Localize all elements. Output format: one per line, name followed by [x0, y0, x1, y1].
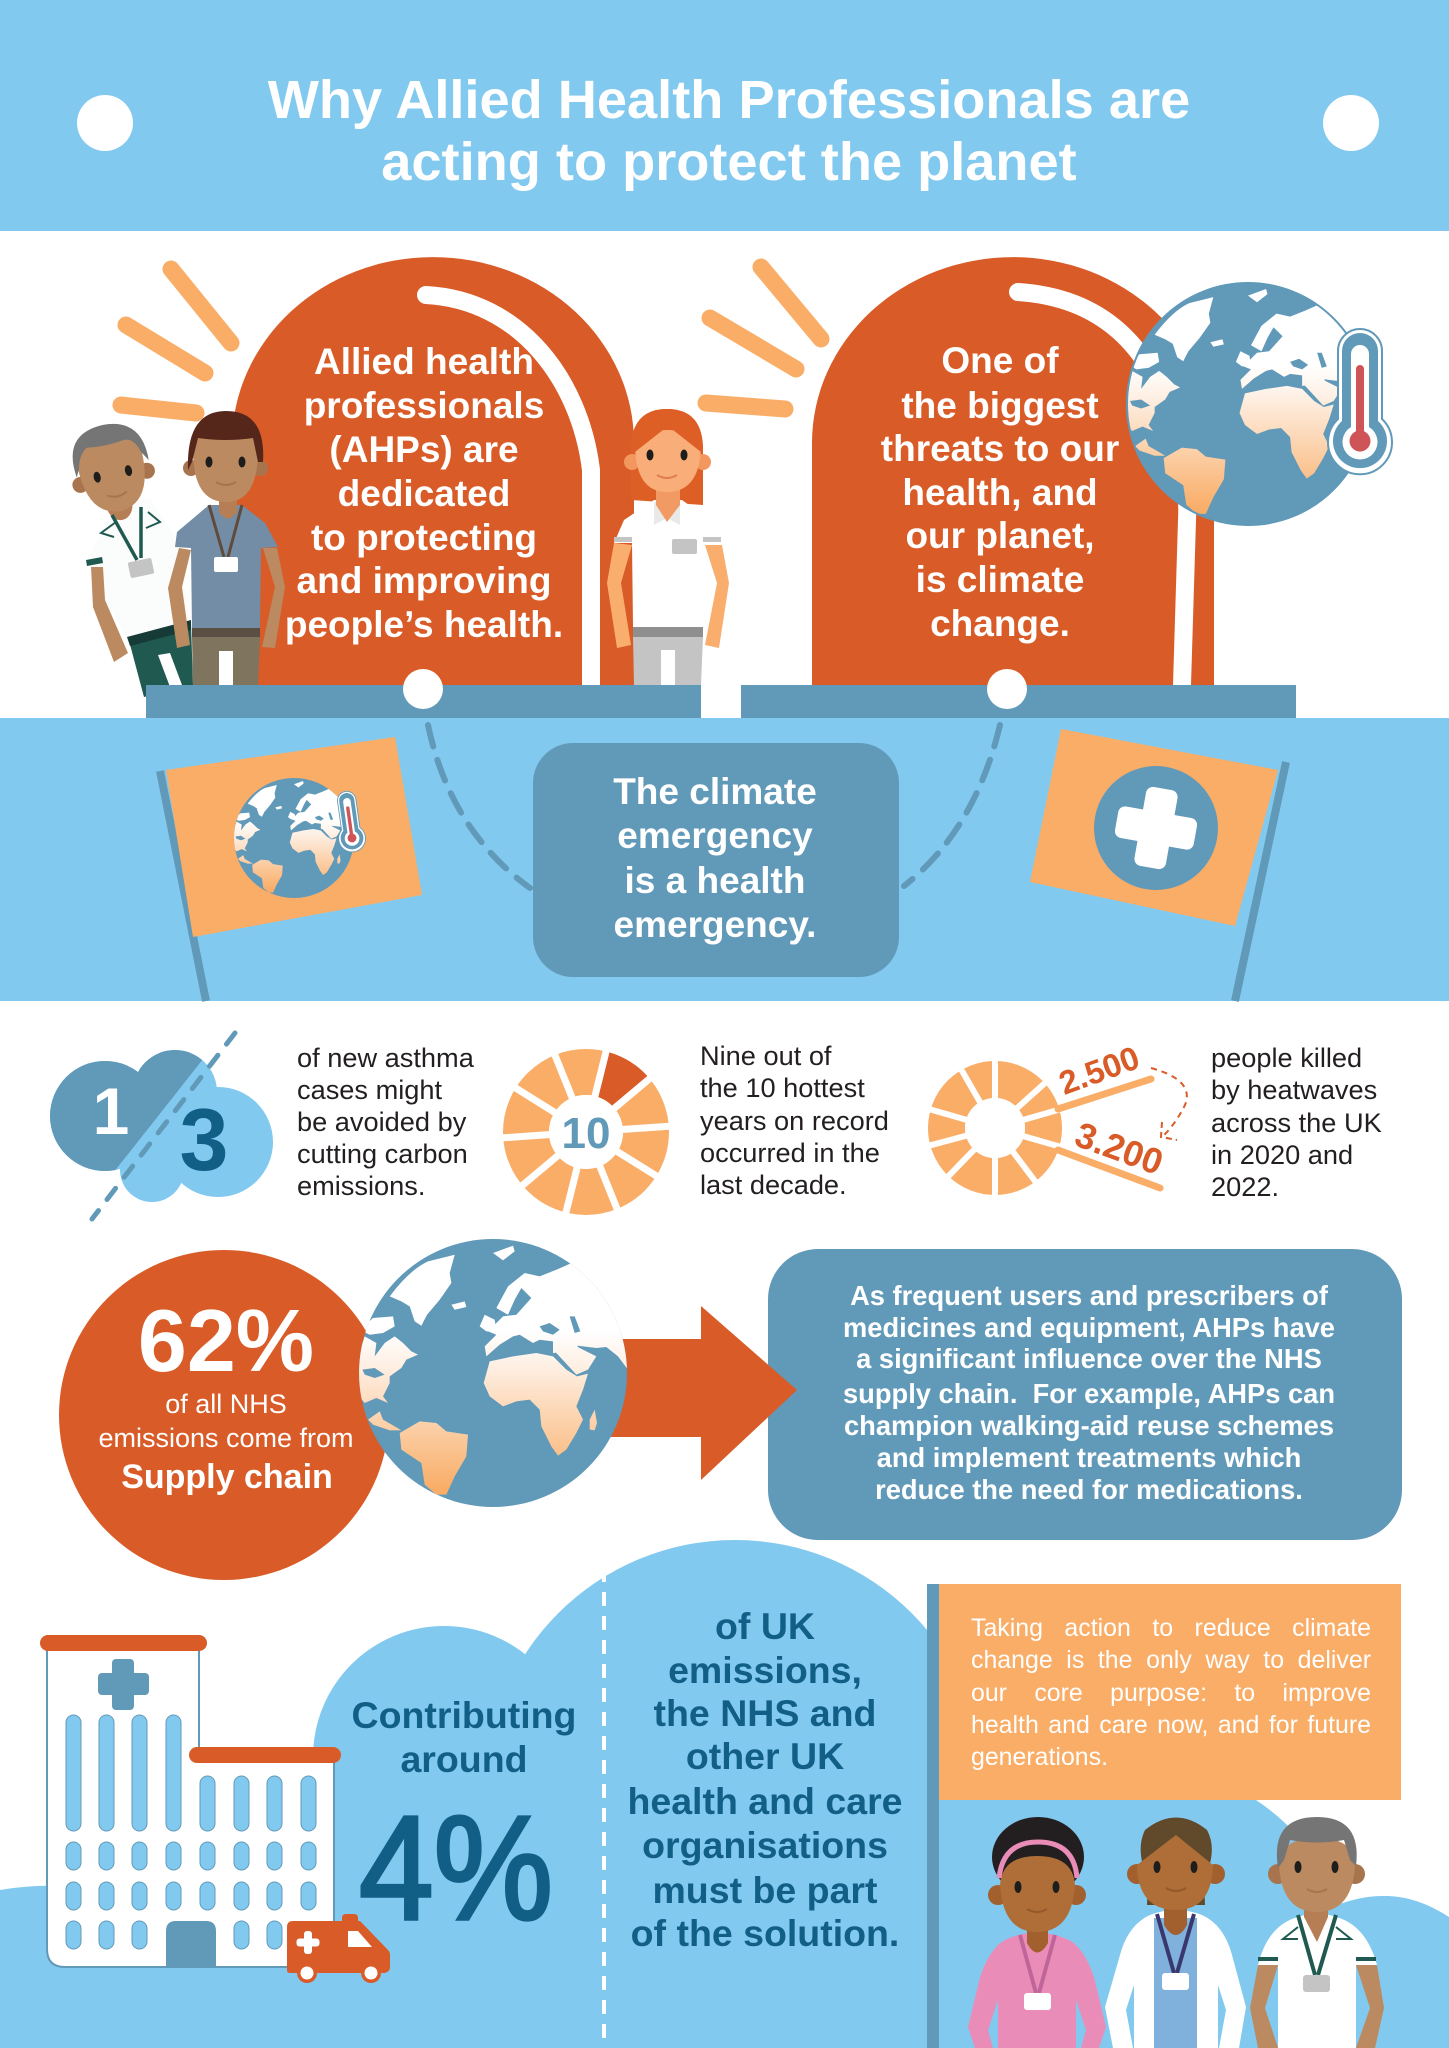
text: AHPs dedicated: (AHPs) are — [329, 429, 519, 470]
stat text: heatwaves: by heatwaves — [1211, 1074, 1377, 1105]
chart: ten-segment wheel — [494, 1043, 678, 1221]
text: biggest threats: our planet, — [905, 515, 1095, 556]
chart: heatwave wheel — [924, 1039, 1187, 1201]
title: Why Allied Health Professionals are — [268, 70, 1190, 130]
panel: supply chain influence: As frequent users and prescribers of — [850, 1280, 1329, 1311]
text: AHPs dedicated: professionals — [304, 385, 544, 426]
figure: woman with orange hair — [607, 409, 729, 685]
stat text: hottest years: Nine out of — [700, 1040, 832, 1071]
circle: 62 percent supply chain: emissions come from — [98, 1423, 354, 1453]
stat text: asthma: be avoided by — [297, 1106, 467, 1137]
text: AHPs dedicated: people’s health. — [285, 604, 563, 645]
text: UK emissions: other UK — [686, 1735, 844, 1777]
stat text: heatwaves: across the UK — [1211, 1107, 1382, 1138]
panel: supply chain influence: a significant influence over the NHS — [856, 1343, 1322, 1374]
stat text: hottest years: years on record — [700, 1105, 889, 1136]
text: UK emissions: of UK — [715, 1605, 815, 1647]
light blue band: climate emergency — [0, 718, 1449, 1001]
figure: doctor in white coat — [1105, 1818, 1246, 2048]
stat: one in three icon: 3 — [180, 1090, 228, 1189]
stat text: asthma: cases might — [297, 1074, 443, 1105]
stat text: heatwaves: in 2020 and — [1211, 1139, 1353, 1170]
panel: supply chain influence — [768, 1249, 1402, 1540]
icon: globe — [356, 1239, 633, 1507]
panel: supply chain influence: medicines and equipment, AHPs have — [843, 1312, 1335, 1343]
circle: 62 percent supply chain: Supply chain — [121, 1458, 333, 1496]
background: bottom cloud — [0, 1540, 1449, 2048]
text: AHPs dedicated: dedicated — [338, 473, 510, 514]
stat text: hottest years: occurred in the — [700, 1137, 880, 1168]
text: biggest threats: the biggest — [901, 385, 1099, 426]
rays: left alarm — [121, 269, 231, 413]
text: biggest threats: health, and — [902, 472, 1098, 513]
figure: woman in pink — [968, 1817, 1106, 2048]
stat text: asthma: of new asthma — [297, 1042, 475, 1073]
chart: ten-segment wheel: 10 — [562, 1109, 610, 1158]
stat text: asthma: cutting carbon — [297, 1138, 468, 1169]
panel: supply chain influence: reduce the need for medications. — [875, 1474, 1303, 1505]
stat text: asthma: emissions. — [297, 1170, 425, 1201]
icon: ambulance — [287, 1914, 390, 1983]
panel: call to action: health and care now, and for future — [971, 1711, 1371, 1739]
text: contributing around — [352, 1694, 576, 1780]
callout: climate emergency: emergency — [617, 815, 813, 856]
panel: call to action: generations. — [971, 1743, 1108, 1771]
text: UK emissions: organisations — [642, 1824, 888, 1866]
stat text: heatwaves: 2022. — [1211, 1171, 1279, 1202]
chart: heatwave wheel: 3.200 — [1070, 1114, 1169, 1183]
text: UK emissions: health and care — [627, 1780, 903, 1822]
circle: 62 percent supply chain: of all NHS — [165, 1389, 287, 1419]
text: biggest threats — [881, 340, 1119, 644]
figure: man in grey-blue shirt — [168, 411, 285, 685]
dashed divider — [602, 1568, 606, 2048]
panel: supply chain influence: champion walking-aid reuse schemes — [844, 1410, 1334, 1441]
circle: 62 percent supply chain — [59, 1250, 389, 1580]
callout: climate emergency: emergency. — [614, 904, 816, 945]
panel: call to action: change is the only way to deliver — [971, 1646, 1371, 1674]
big number: 4 percent: 4% — [359, 1786, 553, 1951]
header band — [0, 0, 1449, 231]
stat: one in three icon — [50, 1033, 273, 1219]
text: biggest threats: One of — [941, 340, 1059, 381]
flag: medical cross — [1030, 729, 1286, 1001]
stat text: asthma — [297, 1042, 475, 1201]
text: UK emissions: the NHS and — [654, 1692, 876, 1734]
figure: older man in white tunic — [61, 416, 193, 697]
text: UK emissions — [627, 1605, 903, 1954]
icon: globe with thermometer — [1125, 283, 1392, 525]
text: UK emissions: of the solution. — [631, 1912, 899, 1954]
callout: climate emergency: is a health — [625, 860, 805, 901]
panel: call to action: our core purpose: to improve — [971, 1679, 1371, 1707]
chart: heatwave wheel: 2.500 — [1054, 1039, 1144, 1102]
arrow: supply chain — [560, 1306, 797, 1480]
alarm base: right — [741, 669, 1296, 718]
title — [268, 70, 1190, 192]
figure: older man in white tunic, green trim — [1250, 1817, 1384, 2048]
icon: hospital — [40, 1635, 341, 1967]
alarm base: left — [146, 669, 701, 718]
text: biggest threats: change. — [930, 603, 1070, 644]
dashed connector: right — [904, 725, 1000, 886]
stat text: hottest years: last decade. — [700, 1169, 847, 1200]
panel: right alarm bell — [812, 257, 1214, 685]
title: acting to protect the planet — [381, 132, 1077, 192]
text: contributing around: Contributing — [352, 1694, 576, 1736]
text: AHPs dedicated — [285, 341, 563, 645]
stat text: hottest years — [700, 1040, 889, 1200]
stat text: heatwaves — [1211, 1042, 1382, 1202]
stat text: hottest years: the 10 hottest — [700, 1072, 865, 1103]
panel: call to action — [927, 1584, 1401, 2048]
text: UK emissions: must be part — [652, 1869, 878, 1911]
callout: climate emergency — [533, 743, 899, 977]
text: AHPs dedicated: Allied health — [314, 341, 534, 382]
rays: right alarm — [706, 267, 821, 409]
circle: 62 percent supply chain: 62% — [138, 1291, 314, 1390]
dashed connector: left — [428, 725, 530, 888]
flag: globe — [160, 737, 422, 1001]
text: biggest threats: is climate — [916, 559, 1084, 600]
panel: supply chain influence: supply chain. For example, AHPs can — [843, 1378, 1335, 1409]
callout: climate emergency: The climate — [613, 771, 817, 812]
text: AHPs dedicated: and improving — [297, 560, 551, 601]
text: biggest threats: threats to our — [881, 428, 1119, 469]
text: contributing around: around — [400, 1738, 528, 1780]
stat: one in three icon: 1 — [93, 1074, 129, 1148]
panel: supply chain influence: and implement treatments which — [877, 1442, 1301, 1473]
text: UK emissions: emissions, — [668, 1649, 862, 1691]
text: AHPs dedicated: to protecting — [311, 517, 537, 558]
stat text: heatwaves: people killed — [1211, 1042, 1362, 1073]
panel: call to action: Taking action to reduce climate — [971, 1614, 1371, 1642]
panel: left alarm bell — [232, 257, 634, 685]
